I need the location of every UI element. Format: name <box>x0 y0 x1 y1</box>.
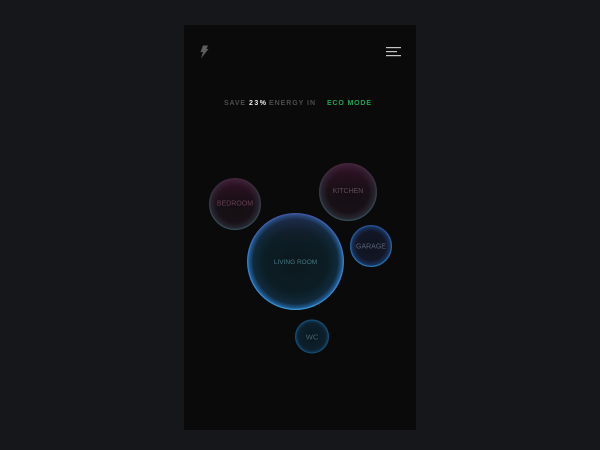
heading: savings message: SAVE <box>224 100 245 107</box>
heading: savings message: ENERGY IN <box>269 100 315 107</box>
bubble: bedroom <box>210 178 260 230</box>
bubble: living room: LIVING ROOM <box>274 259 317 266</box>
bubble: bedroom: BEDROOM <box>217 200 253 208</box>
bubble: kitchen <box>320 164 376 220</box>
bubble: wc <box>296 320 328 353</box>
bubble: garage: GARAGE <box>356 244 386 250</box>
phone screen panel <box>184 25 416 430</box>
heading: savings message <box>224 100 371 107</box>
bubble: wc: WC <box>306 332 319 342</box>
bubble: kitchen: KITCHEN <box>333 188 363 195</box>
heading: savings message: ECO MODE <box>327 100 371 107</box>
icon: menu <box>386 47 401 56</box>
bubble: garage <box>350 226 392 266</box>
bubble: living room <box>248 214 344 310</box>
heading: savings message: 23% <box>249 100 267 107</box>
icon: lightning bolt <box>200 46 208 58</box>
